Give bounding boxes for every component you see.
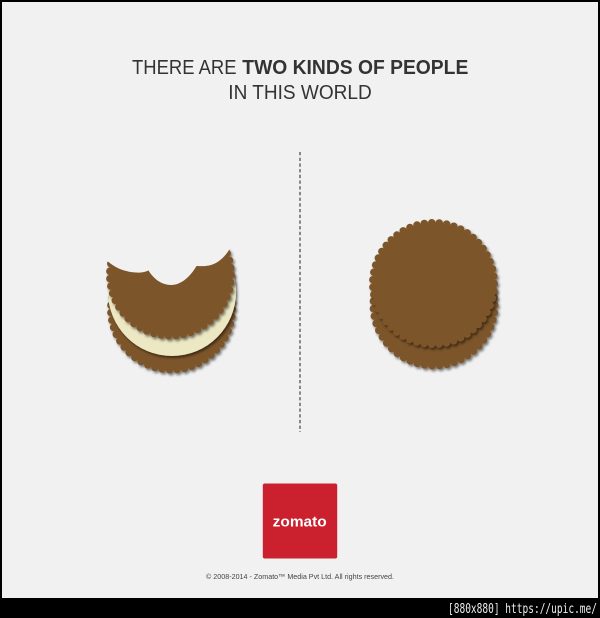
logo: zomato [263, 484, 337, 558]
icon: bitten sandwich cookie [95, 200, 245, 370]
title [132, 57, 468, 104]
upper cookie [373, 223, 494, 344]
bite mark [95, 200, 245, 285]
icon: whole sandwich cookie [373, 223, 495, 366]
title: IN THIS WORLD [228, 82, 372, 104]
lower cookie [373, 244, 495, 366]
copyright: © 2008-2014 - Zomato™ Media Pvt Ltd. All rights reserved. [206, 572, 394, 581]
bottom cookie [111, 248, 232, 370]
title: THERE ARE [132, 57, 236, 79]
logo: zomato: zomato [273, 514, 327, 530]
title: TWO KINDS OF PEOPLE [242, 57, 468, 79]
dashed divider [299, 152, 301, 432]
top cookie [110, 214, 231, 336]
cream filling [108, 228, 236, 356]
